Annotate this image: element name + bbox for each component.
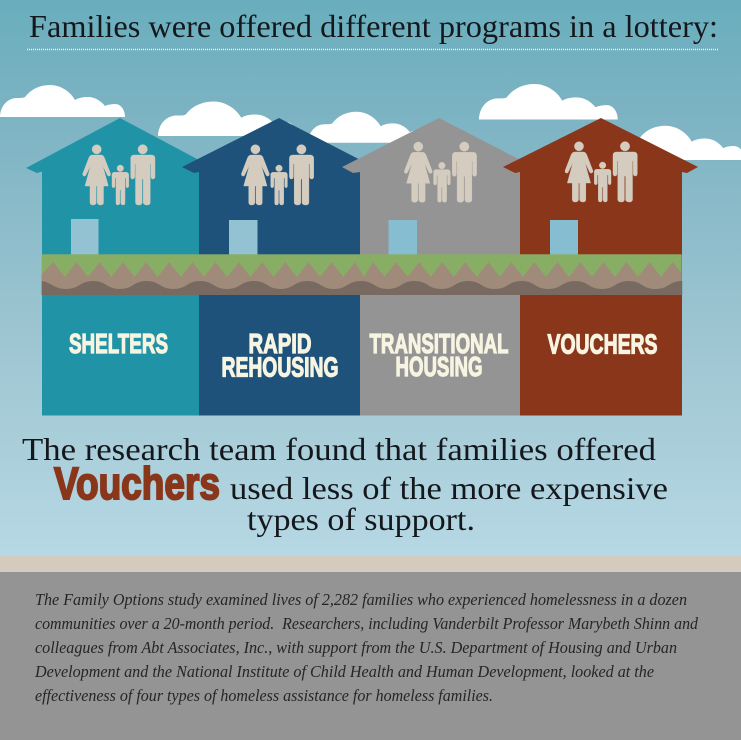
panel: study description [0, 572, 741, 740]
label: vouchers: VOUCHERS [548, 328, 658, 360]
label: shelters: SHELTERS [69, 328, 168, 359]
icon: family [565, 142, 637, 202]
clouds [0, 84, 741, 160]
house: vouchers [503, 118, 698, 416]
label: transitional housing: TRANSITIONAL [370, 328, 508, 359]
icon: family [404, 142, 477, 202]
ground strip [42, 254, 682, 295]
title: Families were offered different programs in a lottery: [29, 8, 718, 44]
icon: family [83, 145, 155, 205]
panel: study description: The Family Options study examined lives of 2,282 families who experienced homelessness in a dozen [35, 590, 687, 609]
highlighted word: Vouchers: Vouchers [54, 458, 220, 509]
house: rapid rehousing [182, 118, 376, 416]
panel: study description: colleagues from Abt Associates, Inc., with support from the U.S. Department of Housing and Urban [35, 638, 677, 657]
label: transitional housing [370, 328, 508, 382]
sky background [0, 0, 741, 556]
finding statement: used less of the more expensive [230, 471, 668, 506]
panel: study description: communities over a 20-month period. Researchers, including Vanderbilt Professor Marybeth Shinn and [35, 614, 698, 633]
beige band [0, 556, 741, 572]
panel: study description: Development and the National Institute of Child Health and Human Development, looked at the [34, 662, 654, 681]
label: rapid rehousing: RAPID [248, 328, 312, 359]
icon: family [241, 145, 314, 205]
panel: study description: effectiveness of four types of homeless assistance for homeless families. [35, 686, 493, 705]
finding statement: The research team found that families offered [22, 432, 656, 467]
label: rapid rehousing [222, 328, 338, 382]
label: transitional housing: HOUSING [396, 351, 482, 382]
finding statement [22, 432, 668, 537]
house: transitional housing [342, 118, 536, 416]
label: rapid rehousing: REHOUSING [222, 352, 338, 382]
finding statement: types of support. [247, 502, 475, 537]
house: shelters [26, 118, 214, 416]
